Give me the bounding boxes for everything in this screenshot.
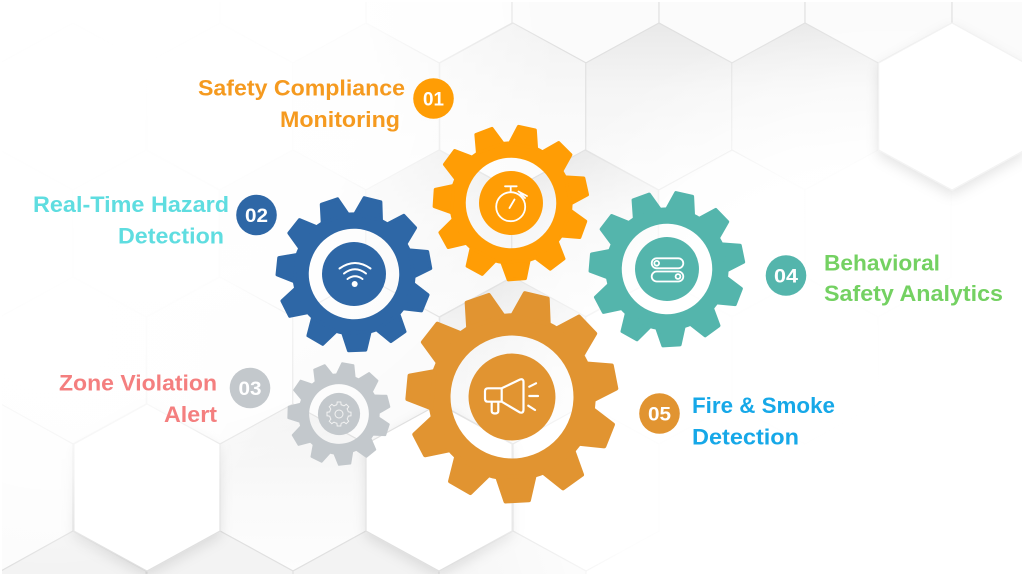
label: Behavioral Safety Analytics: Behavioral <box>824 251 940 276</box>
icon: stopwatch <box>496 186 527 221</box>
label: Safety Compliance Monitoring <box>198 76 405 132</box>
label: Zone Violation Alert: Alert <box>164 402 218 427</box>
label: Behavioral Safety Analytics <box>824 251 1003 306</box>
label: Zone Violation Alert: Zone Violation <box>59 371 217 396</box>
badge 05: 05 <box>648 404 671 425</box>
gear: orange stopwatch <box>419 112 603 295</box>
label: Fire & Smoke Detection <box>692 393 835 450</box>
label: Real-Time Hazard Detection: Real-Time Hazard <box>33 192 229 217</box>
label: Fire & Smoke Detection: Fire & Smoke <box>692 393 835 418</box>
badge 04: 04 <box>774 266 798 287</box>
label: Real-Time Hazard Detection <box>33 192 229 249</box>
label: Safety Compliance Monitoring: Monitoring <box>280 107 400 132</box>
badge 05 <box>639 393 680 434</box>
badge 03 <box>230 368 270 408</box>
icon: small gear outline <box>327 402 351 426</box>
label: Fire & Smoke Detection: Detection <box>692 425 799 450</box>
label: Zone Violation Alert <box>59 371 218 427</box>
icon: toggle switches <box>652 258 683 282</box>
badge 01: 01 <box>423 89 444 110</box>
badge 04 <box>766 255 806 296</box>
label: Safety Compliance Monitoring: Safety Compliance <box>198 76 405 100</box>
gear: grey settings <box>280 355 398 473</box>
badge 02: 02 <box>245 206 268 227</box>
gear: large amber megaphone <box>385 271 639 524</box>
badge 02 <box>236 195 277 235</box>
icon: megaphone <box>485 379 538 414</box>
icon: wifi <box>340 263 370 287</box>
gear: teal toggles <box>574 177 760 362</box>
badge 03: 03 <box>238 379 262 400</box>
badge 01 <box>413 78 454 119</box>
gear: blue wifi <box>260 181 448 368</box>
label: Behavioral Safety Analytics: Safety Analytics <box>824 281 1003 306</box>
label: Real-Time Hazard Detection: Detection <box>118 224 224 249</box>
